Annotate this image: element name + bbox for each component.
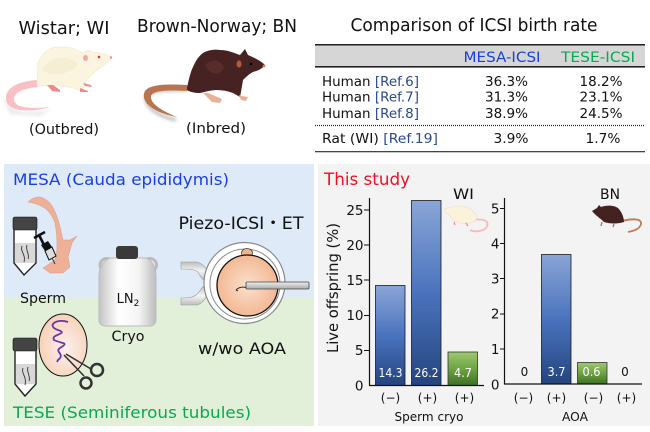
chart: BN live offspring: (+) bbox=[617, 391, 636, 405]
label: WI: WI bbox=[453, 187, 474, 203]
chart: WI live offspring: 5 bbox=[355, 343, 364, 359]
chart: BN live offspring: (−) bbox=[514, 391, 533, 405]
table: ICSI birth rate: 18.2% bbox=[580, 75, 622, 90]
chart: WI live offspring: (+) bbox=[455, 391, 474, 405]
icon: sperm tube bottom bbox=[13, 338, 37, 396]
chart: BN live offspring: 0 bbox=[621, 365, 629, 379]
table: ICSI birth rate: 23.1% bbox=[580, 90, 622, 106]
chart: WI live offspring: 15 bbox=[346, 273, 364, 289]
panel: workflow bbox=[4, 164, 314, 426]
label: outbred: (Outbred) bbox=[29, 122, 99, 138]
heading: Brown-Norway strain: Brown-Norway; BN bbox=[137, 17, 297, 37]
table: ICSI birth rate: 36.3% bbox=[485, 75, 528, 90]
label: inbred: (Inbred) bbox=[186, 121, 246, 137]
chart: WI live offspring: (+) bbox=[418, 391, 437, 405]
chart: BN live offspring: (−) bbox=[584, 391, 603, 405]
icon: holding pipette bbox=[181, 262, 209, 305]
chart: BN live offspring: 0 bbox=[521, 365, 528, 379]
table: ICSI birth rate: 31.3% bbox=[485, 90, 528, 106]
chart: WI live offspring: 26.2 bbox=[414, 366, 438, 380]
chart: WI live offspring: 0 bbox=[355, 378, 364, 394]
heading: Wistar strain: Wistar; WI bbox=[18, 19, 110, 39]
icon: sperm tube top bbox=[13, 217, 37, 275]
chart: BN live offspring bbox=[491, 187, 642, 424]
table: ICSI birth rate: Human [Ref.8] bbox=[322, 107, 419, 122]
panel: this study bbox=[318, 164, 650, 426]
label: sperm: Sperm bbox=[20, 291, 66, 307]
icon: small BN rat bbox=[592, 205, 641, 232]
chart: BN live offspring: 4 bbox=[491, 236, 500, 252]
chart: WI live offspring: (−) bbox=[381, 391, 400, 405]
icon: LN2 cryo flask: 2 bbox=[134, 299, 139, 309]
heading: TESE: TESE (Seminiferous tubules) bbox=[12, 403, 251, 422]
table: ICSI birth rate: 1.7% bbox=[586, 132, 620, 147]
heading: this study: This study bbox=[323, 170, 410, 189]
icon: brown Brown-Norway rat bbox=[144, 49, 265, 120]
table: ICSI birth rate: Human [Ref.6] bbox=[322, 75, 419, 90]
heading: MESA: MESA (Cauda epididymis) bbox=[13, 170, 229, 189]
chart: WI live offspring: 25 bbox=[346, 203, 364, 219]
chart: BN live offspring: 3 bbox=[491, 272, 500, 288]
heading: comparison table title: Comparison of ICSI birth rate bbox=[350, 16, 598, 36]
chart: BN live offspring: 0.6 bbox=[582, 365, 600, 379]
chart: BN live offspring: AOA bbox=[562, 410, 589, 424]
table: ICSI birth rate: TESE-ICSI bbox=[560, 50, 635, 66]
icon: LN2 cryo flask: LN bbox=[117, 292, 134, 307]
icon: oocyte with injection needle bbox=[204, 242, 309, 324]
chart: WI live offspring: Sperm cryo bbox=[394, 410, 464, 424]
table: ICSI birth rate: Rat (WI) [Ref.19] bbox=[322, 132, 438, 147]
table: ICSI birth rate: MESA-ICSI bbox=[464, 50, 540, 66]
label: with or without AOA: w/wo AOA bbox=[198, 339, 286, 358]
chart: BN live offspring: (+) bbox=[547, 391, 566, 405]
icon: small WI rat bbox=[444, 206, 487, 231]
chart: BN live offspring: 3.7 bbox=[548, 365, 566, 379]
label: y axis: Live offspring (%) bbox=[324, 223, 342, 353]
chart: WI live offspring: 14.3 bbox=[378, 366, 402, 380]
table: ICSI birth rate bbox=[315, 44, 645, 152]
icon: testis with tubule bbox=[39, 314, 87, 376]
chart: BN live offspring: 2 bbox=[491, 306, 500, 322]
icon: white Wistar rat bbox=[4, 47, 112, 116]
chart: WI live offspring: 4.7 bbox=[454, 366, 472, 380]
table: ICSI birth rate: 38.9% bbox=[485, 107, 528, 122]
label: Piezo-ICSI and ET: Piezo-ICSI・ET bbox=[178, 214, 304, 234]
icon: scissors bbox=[64, 354, 103, 388]
chart: WI live offspring bbox=[346, 187, 487, 424]
chart: WI live offspring: 10 bbox=[346, 308, 364, 324]
icon: epididymis bbox=[28, 197, 77, 273]
label: cryo: Cryo bbox=[112, 329, 144, 345]
icon: syringe bbox=[34, 232, 56, 264]
chart: BN live offspring: 1 bbox=[491, 342, 500, 358]
table: ICSI birth rate: Human [Ref.7] bbox=[322, 90, 419, 106]
table: ICSI birth rate: 24.5% bbox=[580, 107, 622, 122]
icon: LN2 cryo flask bbox=[99, 246, 156, 326]
chart: BN live offspring: 5 bbox=[491, 202, 500, 218]
table: ICSI birth rate: 3.9% bbox=[494, 132, 528, 147]
label: BN: BN bbox=[600, 187, 620, 203]
chart: WI live offspring: 20 bbox=[346, 238, 364, 254]
chart: BN live offspring: 0 bbox=[491, 378, 500, 394]
